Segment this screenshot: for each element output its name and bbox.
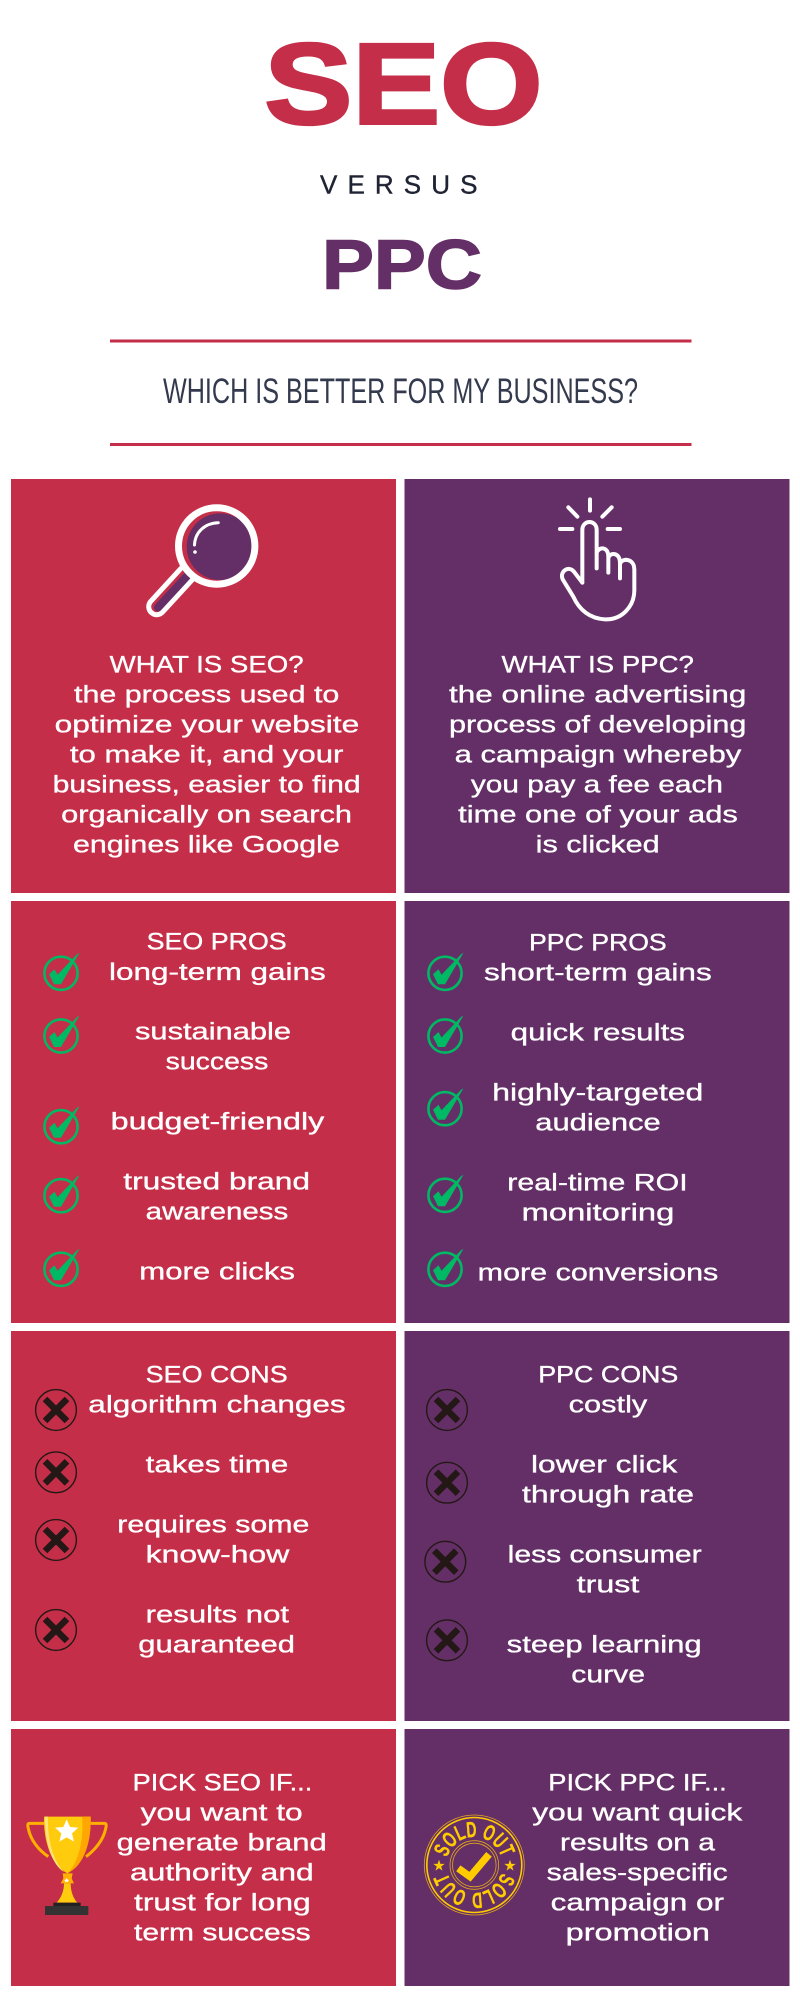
text: less consumer trust: trust (577, 1571, 640, 1598)
text: pick PPC if: PICK PPC IF... (548, 1770, 727, 1797)
text: steep learning curve: steep learning (507, 1631, 702, 1658)
text: more clicks: more clicks (139, 1258, 295, 1285)
text: what is SEO: business, easier to find (53, 771, 361, 798)
icon: sold out stamp: SOLD OUT (433, 1874, 514, 1908)
text: pick SEO if (117, 1770, 327, 1947)
text: highly-targeted audience: audience (535, 1110, 661, 1137)
text: requires some know-how (117, 1511, 309, 1568)
icon: check 4 (428, 1175, 464, 1212)
text: trusted brand awareness: trusted brand (123, 1168, 310, 1195)
heading: PPC cons: PPC CONS (538, 1361, 678, 1388)
icon: check 2 (428, 1016, 464, 1053)
icon: cross 4 (427, 1620, 467, 1661)
panel: SEO pros (11, 901, 396, 1323)
text: pick SEO if: term success (134, 1920, 311, 1947)
text: highly-targeted audience (492, 1080, 703, 1137)
text: what is PPC: the online advertising (449, 681, 746, 708)
title: SEO: SEO (264, 20, 542, 148)
icon: cross 1 (36, 1390, 76, 1430)
icon: check 2 (44, 1016, 80, 1053)
icon: magnifying glass (157, 508, 255, 608)
text: more conversions: more conversions (478, 1260, 718, 1287)
text: results not guaranteed: guaranteed (138, 1631, 295, 1658)
text: trusted brand awareness: awareness (146, 1198, 288, 1225)
panel: what is SEO (11, 479, 396, 893)
text: less consumer trust (508, 1541, 702, 1598)
text: pick SEO if: you want to (141, 1800, 303, 1827)
text: what is PPC: process of developing (449, 711, 746, 738)
text: pick PPC if: results on a (560, 1830, 716, 1857)
text: lower click through rate (522, 1451, 694, 1508)
text: sustainable success: sustainable (135, 1018, 291, 1045)
text: what is SEO: organically on search (61, 801, 352, 828)
text: quick results: quick results (511, 1020, 685, 1047)
text: requires some know-how: know-how (146, 1541, 290, 1568)
icon: cross 4 (36, 1610, 76, 1650)
text: results not guaranteed: results not (146, 1601, 289, 1628)
icon: check 1 (44, 953, 80, 990)
icon: sold out stamp: SOLD OUT (434, 1822, 516, 1856)
text: pick PPC if (532, 1770, 744, 1947)
text: pick SEO if: PICK SEO IF... (133, 1770, 312, 1797)
text: what is SEO: the process used to (74, 681, 339, 708)
text: costly: costly (569, 1391, 647, 1418)
panel: pick PPC if (404, 1729, 790, 1986)
icon: pointing hand (560, 499, 634, 619)
text: what is SEO: WHAT IS SEO? (110, 651, 304, 678)
icon: check 4 (44, 1175, 80, 1212)
text: steep learning curve (507, 1631, 702, 1688)
text: what is SEO (53, 651, 361, 858)
panel: PPC pros (404, 901, 790, 1323)
panel: SEO cons (11, 1331, 396, 1721)
text: what is PPC: a campaign whereby (455, 741, 741, 768)
heading: PPC pros: PPC PROS (529, 930, 667, 957)
text: what is PPC: is clicked (536, 831, 660, 858)
divider line bottom (110, 443, 692, 446)
icon: check 3 (44, 1106, 80, 1143)
text: real-time ROI monitoring: monitoring (522, 1200, 674, 1227)
text: what is SEO: optimize your website (55, 711, 359, 738)
text: what is SEO: engines like Google (73, 831, 340, 858)
text: less consumer trust: less consumer (508, 1541, 702, 1568)
heading: SEO cons: SEO CONS (146, 1361, 288, 1388)
title: PPC: PPC (322, 226, 482, 304)
text: pick SEO if: trust for long (134, 1890, 311, 1917)
text: pick PPC if: sales-specific (547, 1860, 728, 1887)
text: what is PPC: you pay a fee each (471, 771, 723, 798)
text: pick SEO if: authority and (130, 1860, 314, 1887)
icon: check 1 (428, 953, 464, 990)
icon: check 3 (428, 1088, 464, 1125)
text: what is SEO: to make it, and your (70, 741, 343, 768)
text: highly-targeted audience: highly-targeted (492, 1080, 703, 1107)
text: real-time ROI monitoring: real-time ROI (507, 1170, 688, 1197)
heading: SEO pros: SEO PROS (147, 928, 287, 955)
text: real-time ROI monitoring (507, 1170, 688, 1227)
icon: cross 3 (425, 1541, 466, 1582)
divider line top (110, 340, 692, 342)
text: lower click through rate: through rate (522, 1481, 694, 1508)
text: what is PPC: time one of your ads (458, 801, 738, 828)
text: takes time: takes time (146, 1451, 288, 1478)
text: pick PPC if: campaign or (551, 1890, 724, 1917)
panel: PPC cons (404, 1331, 790, 1721)
icon: cross 1 (427, 1390, 467, 1430)
text: pick SEO if: generate brand (117, 1830, 327, 1857)
icon: check 5 (44, 1249, 80, 1286)
icon: cross 3 (36, 1520, 76, 1560)
text: algorithm changes: algorithm changes (88, 1391, 346, 1418)
icon: sold out stamp (424, 1814, 525, 1916)
text: pick PPC if: promotion (566, 1920, 710, 1947)
subtitle: versus: VERSUS (320, 169, 478, 199)
text: results not guaranteed (138, 1601, 295, 1658)
text: pick PPC if: you want quick (532, 1800, 744, 1827)
icon: trophy (28, 1817, 106, 1915)
text: what is PPC: WHAT IS PPC? (502, 651, 694, 678)
text: short-term gains: short-term gains (484, 960, 712, 987)
text: sustainable success (135, 1018, 291, 1075)
text: what is PPC (449, 651, 746, 858)
panel: what is PPC (404, 479, 790, 893)
text: trusted brand awareness (123, 1168, 310, 1225)
text: sustainable success: success (166, 1048, 268, 1075)
text: long-term gains: long-term gains (109, 959, 326, 986)
text: requires some know-how: requires some (117, 1511, 309, 1538)
text: lower click through rate: lower click (531, 1451, 679, 1478)
text: steep learning curve: curve (571, 1661, 645, 1688)
text: budget-friendly: budget-friendly (111, 1108, 324, 1135)
icon: cross 2 (427, 1462, 467, 1503)
icon: check 5 (428, 1249, 464, 1286)
panel: pick SEO if (11, 1729, 396, 1986)
icon: cross 2 (36, 1452, 76, 1493)
